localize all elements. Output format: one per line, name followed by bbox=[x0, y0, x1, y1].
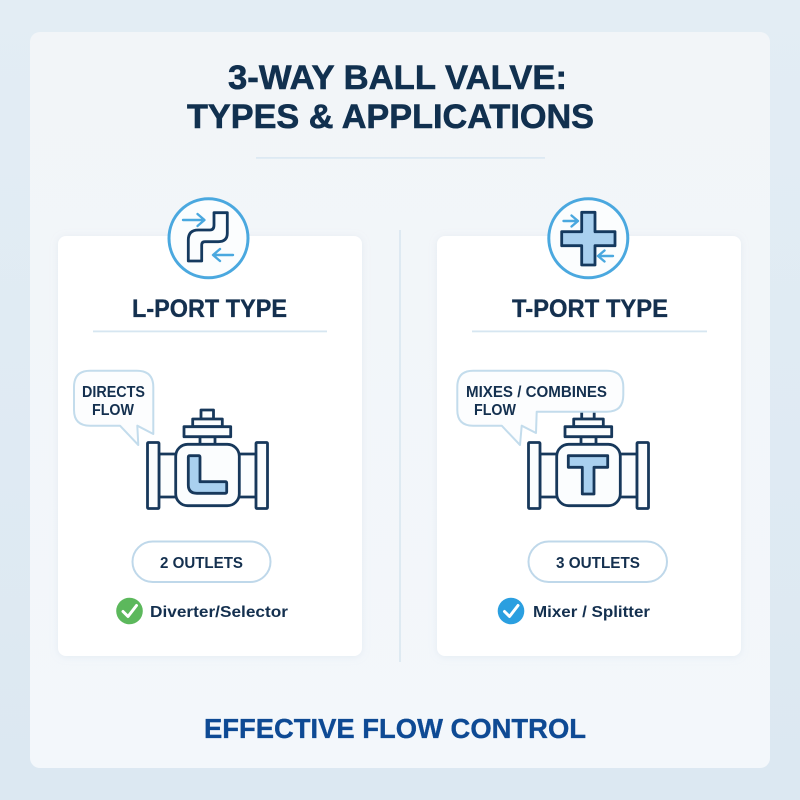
icon: T-port cross badge bbox=[549, 199, 628, 278]
outlet count pill: 3 OUTLETS bbox=[556, 555, 640, 572]
outlet count pill bbox=[132, 542, 270, 582]
panel: T-port type bbox=[437, 199, 741, 656]
callout: mixes / combines flow: MIXES / COMBINES bbox=[466, 384, 607, 401]
callout: mixes / combines flow: FLOW bbox=[474, 402, 516, 419]
use case: mixer / splitter bbox=[498, 598, 650, 624]
title: 3-WAY BALL VALVE: bbox=[228, 59, 567, 97]
use case: diverter/selector: Diverter/Selector bbox=[150, 604, 288, 621]
L-port heading: L-PORT TYPE bbox=[132, 295, 287, 323]
outlet count pill bbox=[528, 542, 667, 582]
L-port card background bbox=[58, 236, 362, 656]
title: TYPES & APPLICATIONS bbox=[187, 98, 594, 136]
use case: diverter/selector bbox=[116, 598, 288, 624]
outlet count pill: 2 OUTLETS bbox=[160, 555, 243, 572]
title bbox=[187, 59, 594, 136]
T-port card background bbox=[437, 236, 741, 656]
callout: directs flow: DIRECTS bbox=[82, 384, 145, 401]
icon: L-port pipe badge bbox=[169, 199, 248, 278]
footer tagline: EFFECTIVE FLOW CONTROL bbox=[204, 713, 586, 744]
callout: directs flow bbox=[74, 371, 153, 445]
T-port heading: T-PORT TYPE bbox=[512, 295, 668, 323]
use case: mixer / splitter: Mixer / Splitter bbox=[533, 604, 650, 621]
callout: directs flow: FLOW bbox=[92, 402, 134, 419]
callout: mixes / combines flow bbox=[457, 371, 623, 445]
panel: L-port type bbox=[58, 199, 362, 656]
icon: L-port valve bbox=[148, 410, 268, 508]
icon: T-port valve bbox=[528, 410, 648, 508]
